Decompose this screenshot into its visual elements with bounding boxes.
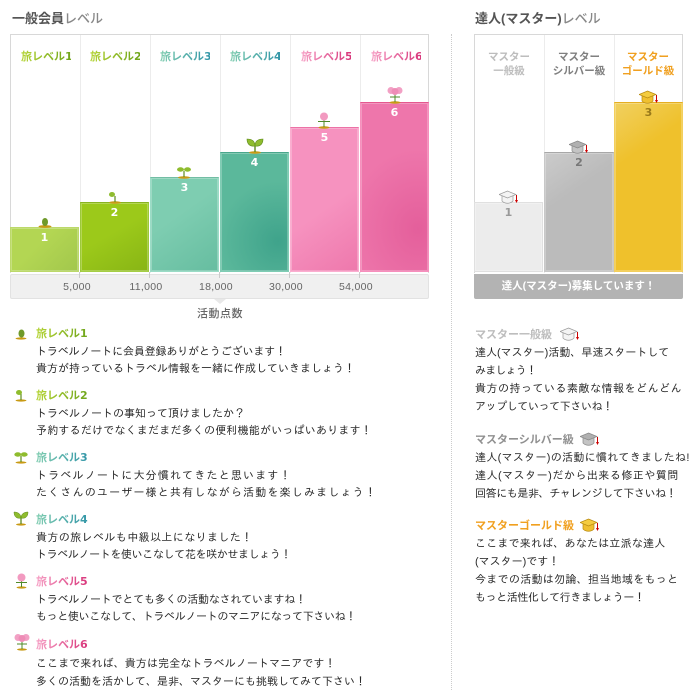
level 5 title: 旅レベル5 <box>36 575 88 588</box>
bar: level 3: 3 <box>181 181 188 194</box>
column label: level 4: 旅レベル4 <box>230 50 282 63</box>
bar: level 2 <box>80 202 149 272</box>
bar: level 6: 6 <box>391 106 398 119</box>
column label: master gold: ゴールド級 <box>622 65 674 77</box>
column label: level 3: 旅レベル3 <box>160 50 212 63</box>
banner: master recruiting: 達人(マスター)募集しています！ <box>502 280 655 292</box>
level 2 text <box>36 408 372 437</box>
bar: level 1: 1 <box>41 231 48 244</box>
master gold text: 今までの活動は勿論、担当地域をもっと <box>475 574 678 586</box>
level 6 text: 多くの活動を活かして、是非、マスターにも挑戦してみて下さい！ <box>36 676 366 688</box>
level 3 title: 旅レベル3 <box>36 451 88 464</box>
level 3 text: たくさんのユーザー様と共有しながら活動を楽しみましょう！ <box>36 487 377 499</box>
level 2 text: トラベルノートの事知って頂けましたか？ <box>36 408 245 420</box>
chart frame <box>10 34 429 273</box>
axis label: 54,000: 54,000 <box>339 281 373 293</box>
icon: level 6 flower <box>388 87 402 104</box>
axis label: 11,000: 11,000 <box>129 281 163 293</box>
bar: master 2: 2 <box>575 156 583 169</box>
level 4 text: トラベルノートを使いこなして花を咲かせましょう！ <box>36 549 291 561</box>
master gold text <box>475 535 678 607</box>
level 4 title: 旅レベル4 <box>36 513 88 526</box>
block: level 3 description <box>14 451 377 499</box>
level 5 text <box>36 594 356 623</box>
block: level 4 description <box>14 512 291 561</box>
block: level 1 description <box>16 327 355 375</box>
level 1 text: 貴方が持っているトラベル情報を一緒に作成していきましょう！ <box>36 363 355 375</box>
bar: level 5: 5 <box>321 131 328 144</box>
heading: general member levels: 一般会員レベル <box>12 11 103 26</box>
bar: level 1 <box>10 227 79 272</box>
master general text: アップしていって下さいね！ <box>475 401 613 413</box>
icon: level 4 <box>14 512 28 526</box>
level 6 text <box>36 658 366 688</box>
level 6 title: 旅レベル6 <box>36 638 88 651</box>
block: level 5 description <box>16 574 356 623</box>
column label: master gold <box>622 51 674 77</box>
column label: master general <box>488 51 530 77</box>
bar: level 5 <box>290 127 359 272</box>
axis strip <box>10 274 429 299</box>
panel: master level chart <box>474 34 683 299</box>
block: master general description <box>475 328 682 413</box>
level 1 title: 旅レベル1 <box>36 327 88 340</box>
icon: gold cap small <box>580 518 600 532</box>
bar: master 3 <box>614 102 683 272</box>
block: master gold description <box>475 518 693 608</box>
icon: level 3 sprout <box>177 167 191 179</box>
divider <box>451 34 452 690</box>
bar: master 1: 1 <box>505 206 512 219</box>
master silver text <box>475 452 690 500</box>
bar: master 3: 3 <box>645 106 652 119</box>
level 5 text: トラベルノートでとても多くの活動なされていますね！ <box>36 594 306 606</box>
bar: master 2 <box>544 152 614 272</box>
bar: level 6 <box>360 102 429 272</box>
column label: level 5: 旅レベル5 <box>301 50 353 63</box>
panel: general level chart <box>10 34 429 299</box>
bar: level 3 <box>150 177 219 272</box>
master gold text: ここまで来れば、あなたは立派な達人 <box>475 538 665 550</box>
level 1 text <box>36 346 355 375</box>
icon: level 4 sprout <box>246 138 264 154</box>
level 4 text <box>36 532 291 561</box>
icon: level 5 <box>16 574 27 589</box>
chart frame <box>474 34 683 273</box>
icon: general cap <box>499 190 518 204</box>
master silver text: 達人(マスター)の活動に慣れてきましたね! <box>475 452 690 464</box>
icon: general cap small <box>560 328 579 341</box>
banner: master recruiting <box>474 274 683 299</box>
block: level 6 description <box>14 634 366 688</box>
column label: master gold: マスター <box>627 51 669 63</box>
level 3 text <box>36 470 377 499</box>
master gold text: (マスター)です！ <box>475 556 559 568</box>
icon: level 5 bud <box>318 112 330 129</box>
icon: level 1 <box>16 330 26 340</box>
column label: level 6: 旅レベル6 <box>371 50 423 63</box>
master general text: 貴方の持っている素敵な情報をどんどん <box>475 383 682 395</box>
icon: level 2 sprout <box>109 192 121 204</box>
level 2 title: 旅レベル2 <box>36 389 88 402</box>
axis title: 活動点数 <box>197 308 243 320</box>
icon: gold cap <box>639 90 658 104</box>
icon: level 6 <box>14 634 30 651</box>
master silver text: 達人(マスター)だから出来る修正や質問 <box>475 470 679 482</box>
level 6 text: ここまで来れば、貴方は完全なトラベルノートマニアです！ <box>36 658 336 670</box>
block: master silver description <box>475 432 690 500</box>
level 5 text: もっと使いこなして、トラベルノートのマニアになって下さいね！ <box>36 611 356 623</box>
master general text: 達人(マスター)活動、早速スタートして <box>475 347 669 359</box>
master silver title: マスターシルバー級 <box>475 434 574 446</box>
icon: silver cap <box>569 140 588 154</box>
master general text <box>475 346 682 413</box>
level 3 text: トラベルノートに大分慣れてきたと思います！ <box>36 470 292 482</box>
icon: level 3 <box>14 452 28 464</box>
master gold text: もっと活性化して行きましょうー！ <box>475 592 645 604</box>
column label: level 1: 旅レベル1 <box>21 50 73 63</box>
column label: level 2: 旅レベル2 <box>90 50 142 63</box>
heading: master levels: 達人(マスター)レベル <box>475 11 601 26</box>
icon: silver cap small <box>580 432 599 446</box>
axis pointer <box>214 299 226 304</box>
master general text: みましょう！ <box>475 365 536 377</box>
icon: level 2 <box>16 390 26 402</box>
bar: level 4 <box>220 152 289 272</box>
column label: master general: マスター <box>488 51 530 63</box>
axis label: 18,000: 18,000 <box>199 281 233 293</box>
master gold title: マスターゴールド級 <box>475 520 574 532</box>
bar: level 2: 2 <box>111 206 118 219</box>
column label: master general: 一般級 <box>493 65 525 77</box>
icon: level 1 sprout <box>38 218 52 228</box>
column label: master silver: マスター <box>558 51 600 63</box>
level 4 text: 貴方の旅レベルも中級以上になりました！ <box>36 532 253 544</box>
axis label: 5,000: 5,000 <box>63 281 91 293</box>
column label: master silver <box>553 51 605 77</box>
block: level 2 description <box>16 389 372 437</box>
bar: level 4: 4 <box>251 156 258 169</box>
master general title: マスター一般級 <box>475 329 552 341</box>
level 1 text: トラベルノートに会員登録ありがとうございます！ <box>36 346 286 358</box>
master silver text: 回答にも是非、チャレンジして下さいね！ <box>475 488 676 500</box>
level 2 text: 予約するだけでなくまだまだ多くの便利機能がいっぱいあります！ <box>36 425 372 437</box>
column label: master silver: シルバー級 <box>553 65 605 77</box>
axis label: 30,000: 30,000 <box>269 281 303 293</box>
bar: master 1 <box>474 202 543 272</box>
